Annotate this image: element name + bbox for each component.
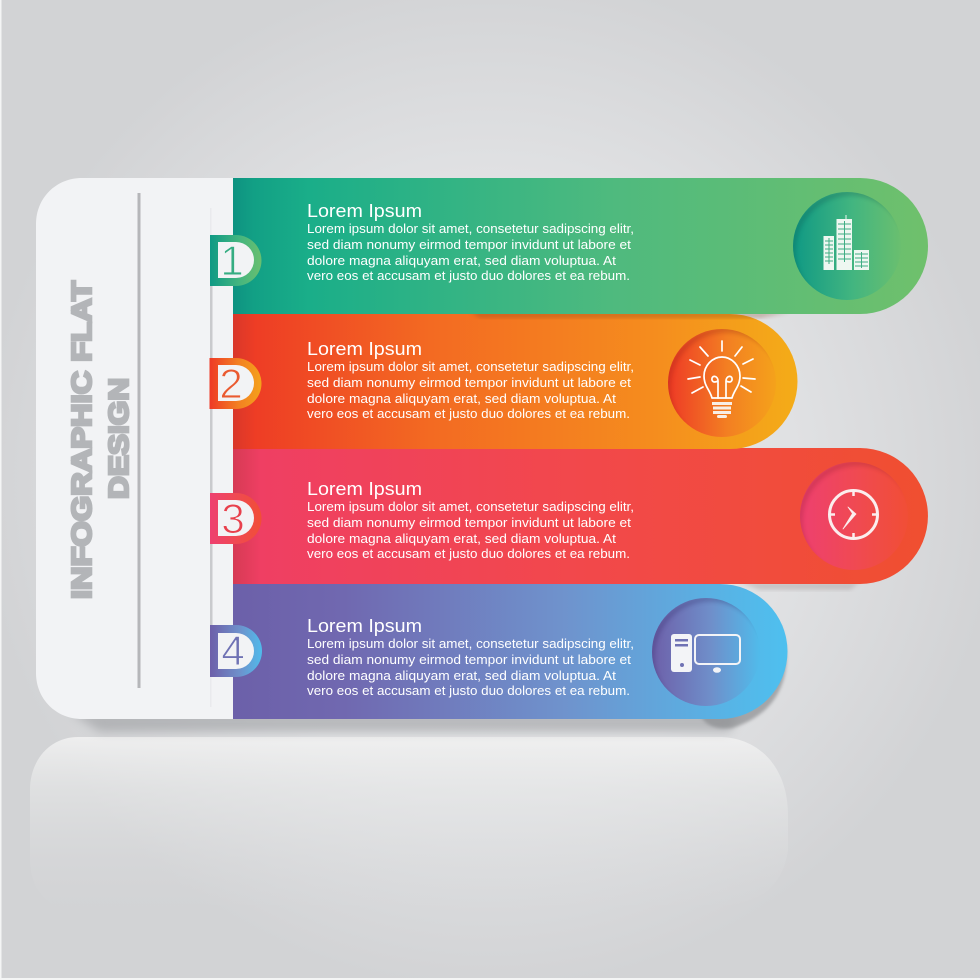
text block 3 [307,479,634,561]
icon: buildings [793,192,896,300]
icon: clock [800,462,900,570]
text block 2: Lorem ipsum dolor sit amet, consetetur sadipscing elitr, [307,360,634,374]
badge 1 [210,235,262,286]
reflection of the infographic [30,737,788,912]
text block 4: vero eos et accusam et justo duo dolores et ea rebum. [307,684,630,698]
badge 4: 4 [221,627,245,674]
text block 1: Lorem Ipsum [307,201,422,221]
text block 4: Lorem Ipsum [307,616,422,636]
badge 4 [210,625,262,677]
badge 3: 3 [221,495,245,542]
panel shadow [70,625,786,732]
panel: band 2 red-orange [233,314,798,449]
text block 2: Lorem Ipsum [307,339,422,359]
heading: vertical title [66,280,135,599]
text block 1: sed diam nonumy eirmod tempor invidunt ut labore et [307,238,632,252]
text block 1: dolore magna aliquyam erat, sed diam voluptua. At [307,254,617,268]
text block 1: vero eos et accusam et justo duo dolores et ea rebum. [307,269,630,283]
heading: vertical title: DESIGN [104,378,135,499]
text block 2: vero eos et accusam et justo duo dolores et ea rebum. [307,407,630,421]
text block 3: vero eos et accusam et justo duo dolores et ea rebum. [307,547,630,561]
text block 2 [307,339,634,421]
text block 3: sed diam nonumy eirmod tempor invidunt ut labore et [307,516,632,530]
panel: band 3 pink-red [233,448,928,590]
text block 3: Lorem Ipsum [307,479,422,499]
text block 1: Lorem ipsum dolor sit amet, consetetur sadipscing elitr, [307,222,634,236]
panel: band 1 green [233,178,928,318]
divider line [138,193,140,688]
tab guide line [210,208,212,707]
text block 3: Lorem ipsum dolor sit amet, consetetur sadipscing elitr, [307,500,634,514]
text block 4: dolore magna aliquyam erat, sed diam voluptua. At [307,669,617,683]
heading: vertical title: INFOGRAPHIC FLAT [66,280,97,599]
text block 3: dolore magna aliquyam erat, sed diam voluptua. At [307,532,617,546]
badge 1: 1 [220,237,244,284]
badge 3 [210,493,262,544]
icon: computer [652,598,754,706]
text block 1 [307,201,634,283]
text block 2: dolore magna aliquyam erat, sed diam voluptua. At [307,392,617,406]
icon: light bulb [668,329,773,437]
text block 2: sed diam nonumy eirmod tempor invidunt ut labore et [307,376,632,390]
badge 2: 2 [219,360,243,407]
text block 4: sed diam nonumy eirmod tempor invidunt ut labore et [307,653,632,667]
badge 2 [210,358,262,409]
panel: band 4 purple-blue [233,584,787,719]
panel: left title card [36,178,240,719]
text block 4: Lorem ipsum dolor sit amet, consetetur sadipscing elitr, [307,637,634,651]
text block 4 [307,616,634,698]
